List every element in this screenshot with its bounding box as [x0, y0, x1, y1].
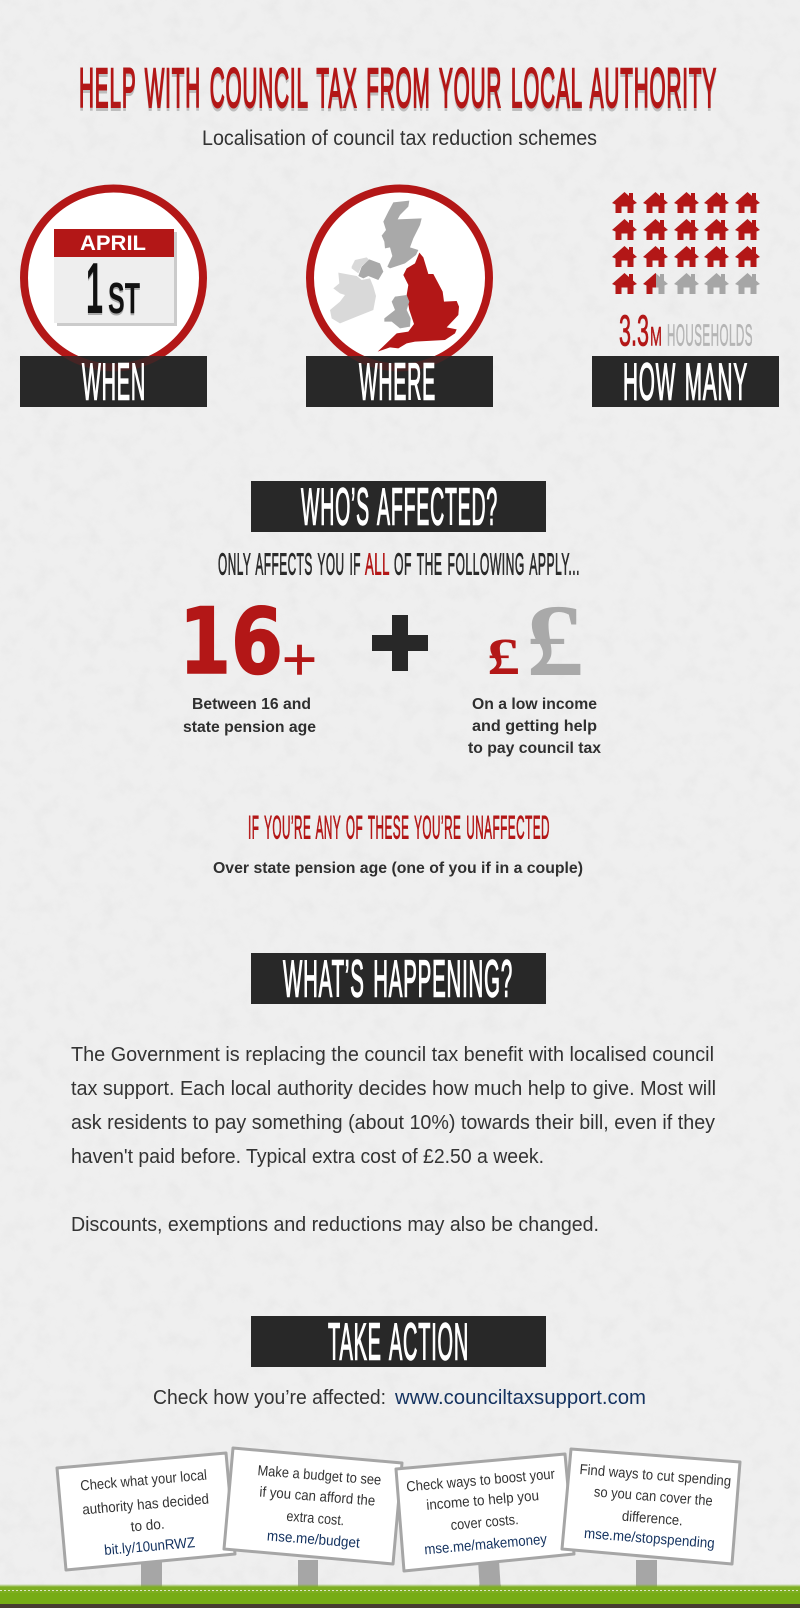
where label bar — [306, 356, 493, 407]
sign 1: bit.ly/10unRWZ — [104, 1535, 196, 1559]
sign 4 — [562, 1449, 740, 1564]
when label bar — [20, 356, 207, 407]
panel: when — [20, 188, 207, 411]
subheading: ALL — [365, 547, 390, 582]
stat: 3.3m households — [619, 307, 753, 356]
sign 4: difference. — [621, 1509, 683, 1529]
check line: Check how you’re affected: — [153, 1387, 386, 1409]
section: who's affected — [179, 478, 601, 877]
icon: calendar in circle: 1 — [86, 249, 103, 329]
criterion: age 16+ — [179, 590, 317, 736]
icon: calendar in circle: ST — [108, 274, 140, 323]
criterion: age 16+: Between 16 and — [192, 696, 311, 713]
sign 2: if you can afford the — [259, 1484, 376, 1510]
sign 1: Check what your local — [80, 1468, 208, 1495]
sign 2: mse.me/budget — [266, 1528, 360, 1552]
subtitle: Localisation of council tax reduction schemes — [202, 127, 597, 150]
criterion: low income — [468, 584, 601, 757]
criterion: age 16+: + — [282, 626, 317, 693]
sign 4: mse.me/stopspending — [583, 1526, 715, 1552]
sign 3: cover costs. — [450, 1512, 519, 1534]
body text: tax support. Each local authority decides how much help to give. Most will — [71, 1078, 716, 1100]
grass and ground — [0, 1584, 800, 1608]
criterion: age 16+: state pension age — [183, 719, 316, 736]
sign 2: Make a budget to see — [257, 1463, 382, 1489]
section: what's happening — [71, 950, 716, 1236]
section: take action — [153, 1313, 646, 1409]
when label bar: WHEN — [82, 353, 146, 411]
criterion: age 16+: 16 — [179, 590, 283, 695]
icon: calendar in circle: APRIL — [80, 232, 146, 255]
heading bar — [251, 478, 546, 536]
icon: map of UK and Ireland in circle — [310, 188, 489, 368]
heading bar — [251, 1313, 546, 1371]
body text: The Government is replacing the council tax benefit with localised council — [71, 1044, 714, 1066]
sign 3: mse.me/makemoney — [424, 1532, 548, 1558]
sign 2 — [224, 1448, 402, 1564]
criterion: low income: to pay council tax — [468, 740, 601, 757]
sign 3: Check ways to boost your — [406, 1467, 556, 1495]
stat: 3.3m households: 3.3 — [619, 307, 649, 356]
sign 3: income to help you — [426, 1488, 540, 1514]
sign 1 — [57, 1453, 235, 1570]
icon: calendar in circle — [24, 188, 203, 368]
sign 4: Find ways to cut spending — [579, 1462, 732, 1490]
icon: plus — [372, 615, 428, 671]
icon: house grid — [612, 192, 760, 294]
where label bar: WHERE — [359, 353, 436, 411]
body text — [71, 1044, 716, 1236]
posts — [141, 1560, 657, 1593]
heading bar — [251, 950, 546, 1008]
criterion: low income: On a low income — [472, 696, 597, 713]
criterion: low income: and getting help — [472, 718, 597, 735]
heading bar: TAKE ACTION — [328, 1313, 469, 1371]
unaffected text: Over state pension age (one of you if in a couple) — [213, 860, 583, 877]
sign 1: authority has decided — [82, 1492, 210, 1519]
body text: ask residents to pay something (about 10%) towards their bill, even if they — [71, 1112, 715, 1134]
criterion: low income: £ — [526, 584, 584, 698]
subheading: ONLY AFFECTS YOU IF — [218, 547, 361, 582]
panel: how many — [592, 192, 779, 411]
sign 1: to do. — [130, 1517, 165, 1535]
check line: www.counciltaxsupport.com — [394, 1387, 646, 1409]
stat: 3.3m households: M — [650, 322, 662, 352]
body text: haven't paid before. Typical extra cost of £2.50 a week. — [71, 1146, 544, 1168]
criterion: low income: £ — [487, 629, 520, 686]
sign 3 — [396, 1454, 574, 1571]
body text: Discounts, exemptions and reductions may also be changed. — [71, 1214, 599, 1236]
check line — [153, 1387, 646, 1409]
sign 4: so you can cover the — [593, 1484, 713, 1510]
panel: where — [306, 188, 493, 411]
sign 2: extra cost. — [286, 1509, 345, 1529]
